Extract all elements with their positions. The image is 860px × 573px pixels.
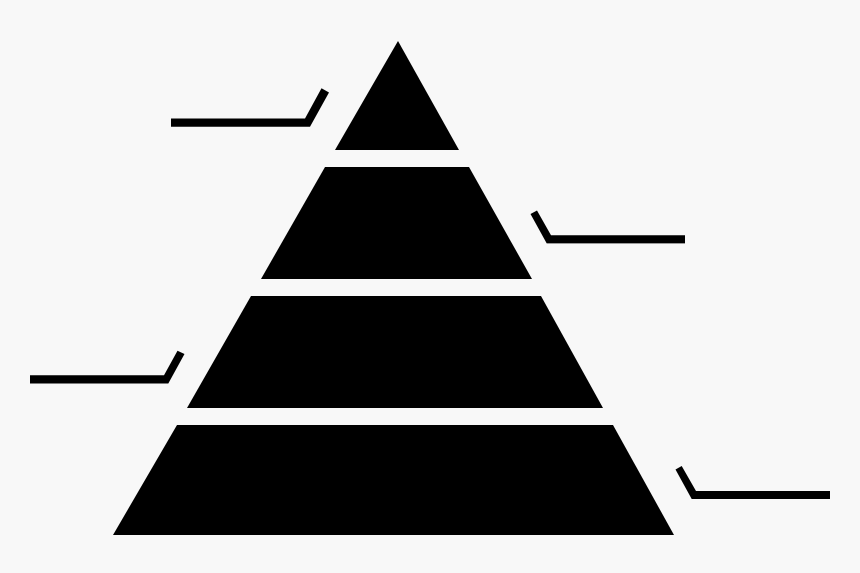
- pyramid tier 2: [261, 167, 532, 279]
- callout line: tier 4: [676, 466, 830, 499]
- callout line: tier 3: [30, 351, 184, 384]
- pyramid tier 1: apex: [335, 41, 459, 150]
- callout line: tier 2: [530, 210, 685, 243]
- callout line: tier 1: [171, 88, 329, 127]
- pyramid tier 3: [187, 296, 603, 408]
- pyramid tier 4: base: [113, 425, 674, 535]
